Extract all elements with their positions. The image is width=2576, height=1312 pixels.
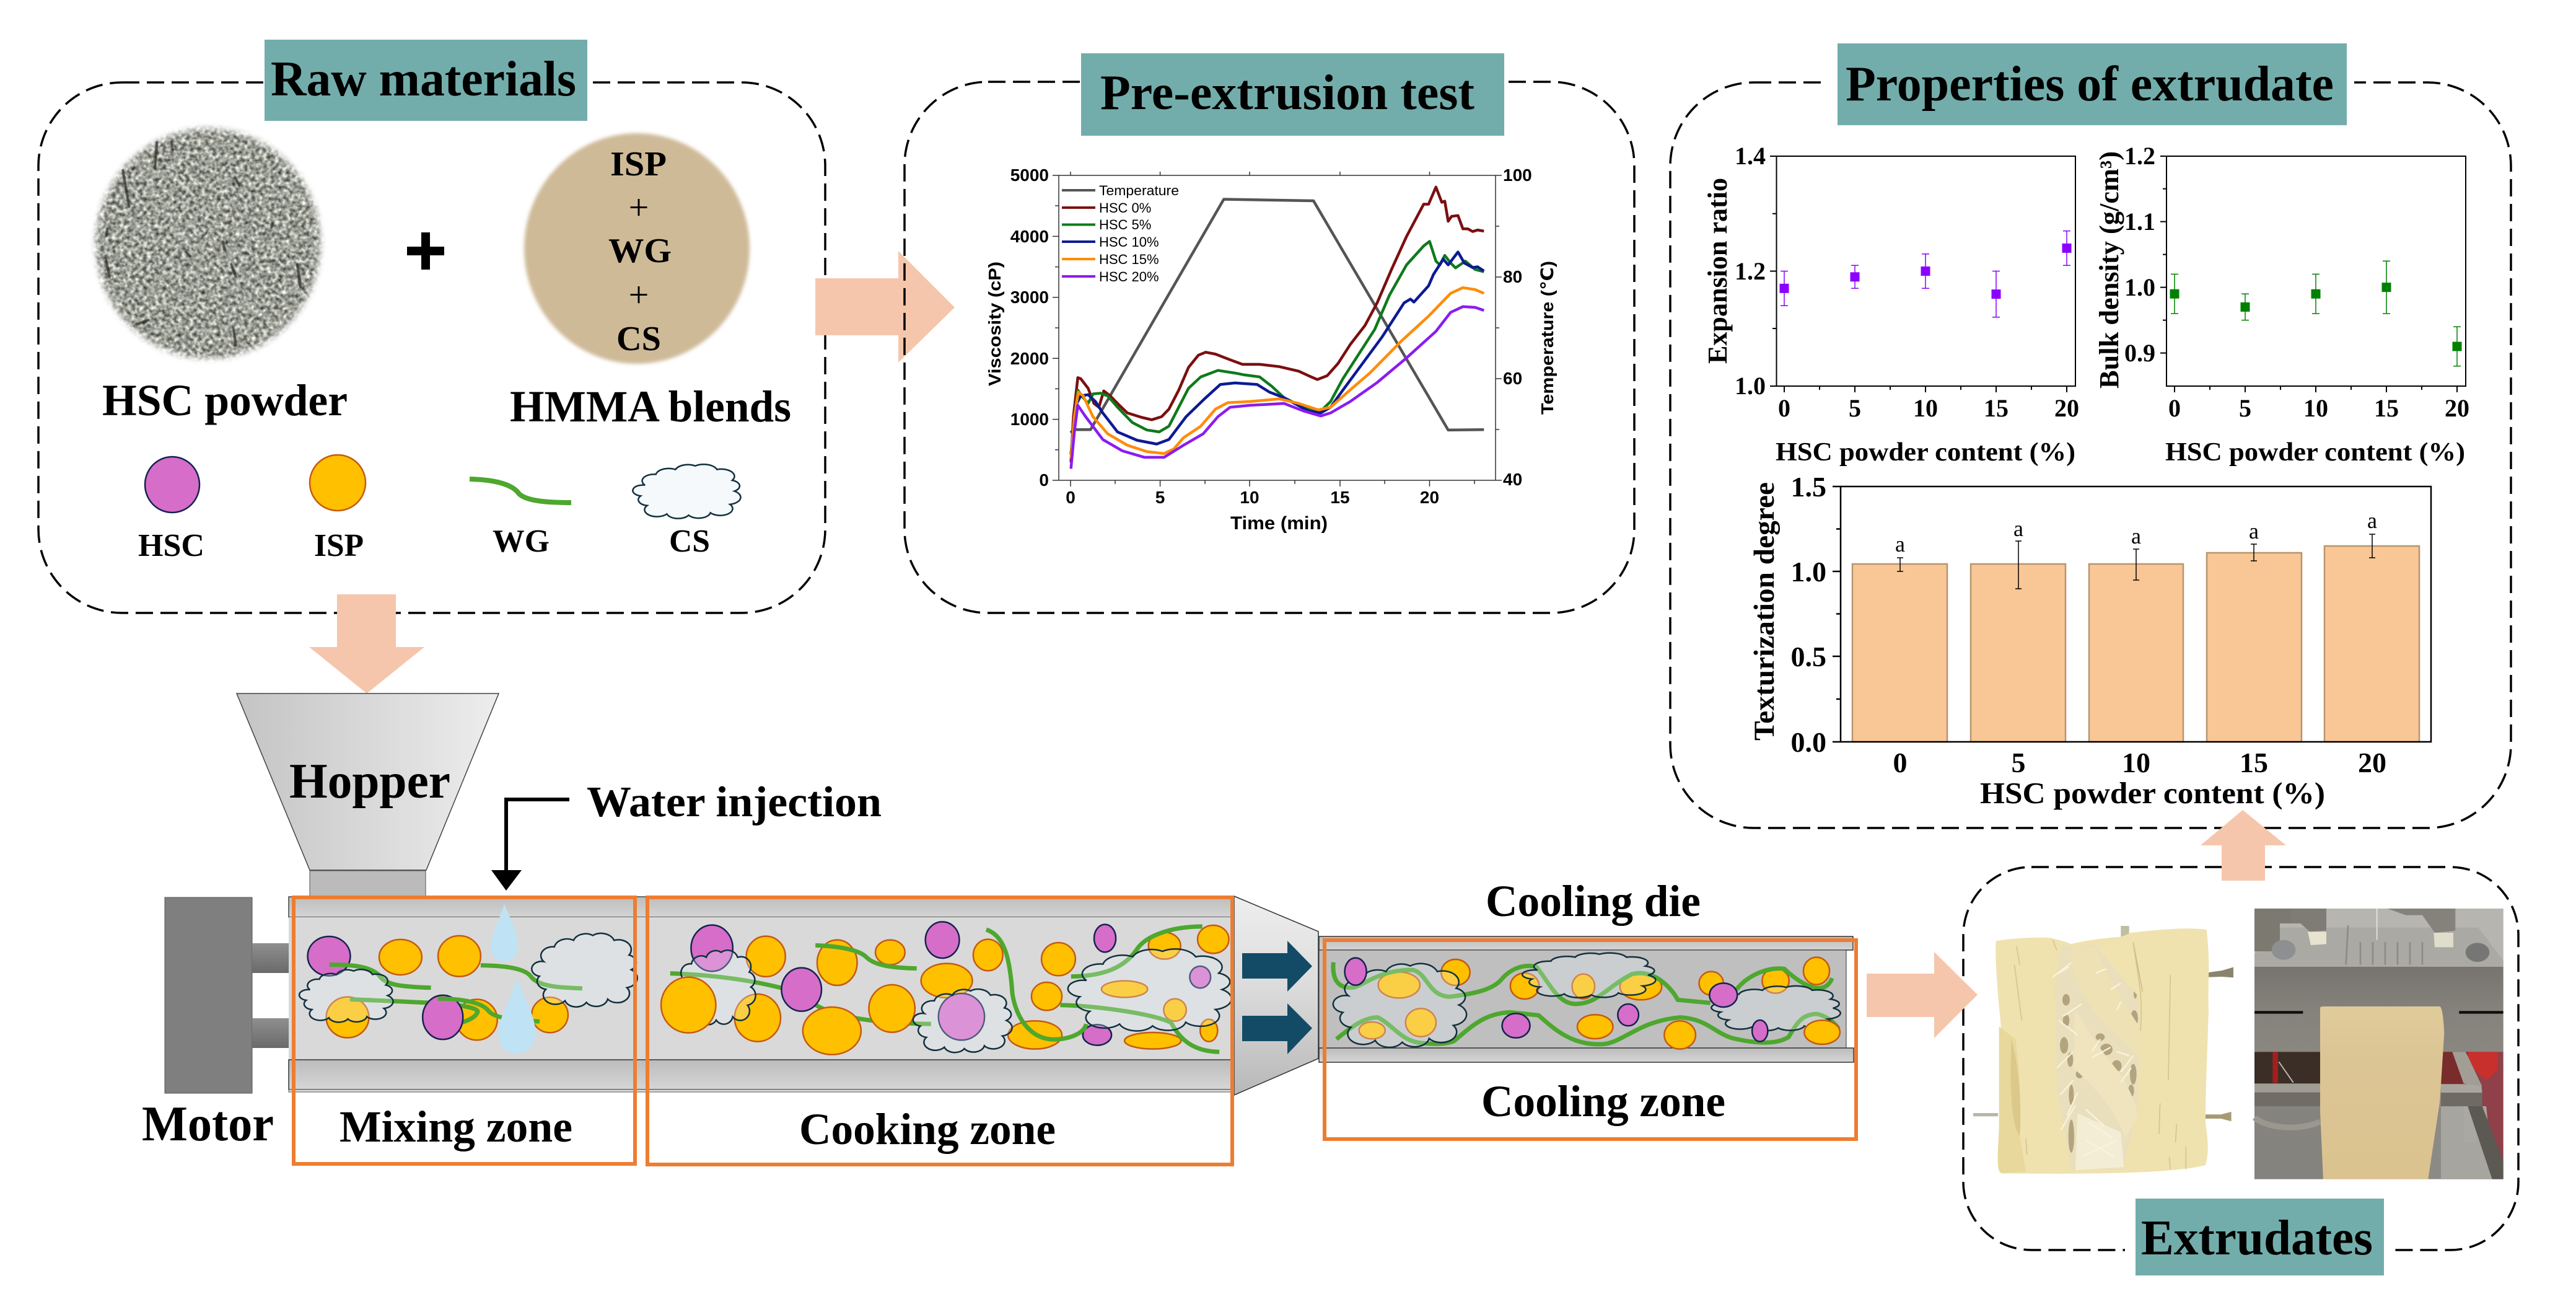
motor (165, 897, 252, 1093)
image: HMMA blends disc: ISP (610, 145, 667, 183)
zone box: cooking zone (647, 897, 1232, 1165)
panel: pre-extrusion test (905, 53, 1634, 613)
scatter chart: bulk density: 20 (2445, 394, 2469, 422)
line chart: viscosity and temperature: Time (min) (1230, 513, 1328, 534)
particles: cooking zone (661, 922, 1232, 1055)
scatter chart: bulk density: 1.2 (2124, 142, 2155, 170)
bar chart: texturization degree: 20 (2358, 747, 2386, 778)
arrow: flow lower (1242, 1003, 1312, 1054)
label: mixing zone: Mixing zone (340, 1102, 572, 1151)
bar chart: texturization degree: Texturization degree (1748, 482, 1781, 741)
line chart: viscosity and temperature: 0 (1039, 470, 1049, 490)
panel: raw materials (38, 40, 825, 613)
heading: extrudates (2125, 1199, 2395, 1275)
bar chart: texturization degree: HSC powder content (%) (1980, 776, 2325, 810)
line chart: viscosity and temperature: 0 (1066, 488, 1076, 507)
line chart: viscosity and temperature: 80 (1503, 267, 1522, 286)
arrow: raw materials to pre-extrusion (815, 251, 955, 363)
icon: plus (407, 232, 444, 270)
line chart: viscosity and temperature: Viscosity (cP) (985, 262, 1004, 386)
image: HSC powder (96, 129, 320, 358)
scatter chart: expansion ratio: 1.0 (1735, 372, 1766, 400)
line chart: viscosity and temperature: 1000 (1010, 410, 1049, 429)
image: HMMA blends disc: CS (616, 320, 661, 358)
heading: properties of extrudate (1828, 43, 2354, 125)
motor shafts (252, 943, 292, 1048)
arrow: raw materials to hopper (309, 594, 424, 693)
heading: raw materials (265, 40, 587, 121)
zone box: cooling zone (1325, 940, 1856, 1139)
particles: mixing zone (299, 904, 637, 1054)
image: HMMA blends disc (524, 133, 750, 364)
scatter chart: expansion ratio: 5 (1849, 394, 1861, 422)
heading: properties of extrudate: Properties of extrudate (1846, 57, 2334, 112)
cone (1234, 896, 1318, 1095)
scatter chart: bulk density: 1.1 (2124, 208, 2155, 236)
scatter chart: expansion ratio: HSC powder content (%) (1776, 438, 2075, 467)
barrel (289, 897, 1234, 1092)
legend: ISP: ISP (314, 528, 364, 563)
legend: HSC (138, 457, 204, 563)
line chart: viscosity and temperature: Temperature (℃) (1538, 261, 1557, 415)
line chart: viscosity and temperature: 2000 (1010, 349, 1049, 368)
arrow: cooling die to extrudates (1867, 952, 1978, 1038)
scatter chart: expansion ratio: 15 (1984, 394, 2009, 422)
bar chart: texturization degree: 1.0 (1790, 556, 1826, 588)
line chart: viscosity and temperature: HSC 15% (1099, 252, 1159, 267)
legend: CS (633, 464, 740, 559)
bar chart: texturization degree: 1.5 (1790, 471, 1826, 503)
arrow: extrudates to properties (2201, 810, 2286, 881)
line chart: viscosity and temperature: 20 (1420, 488, 1439, 507)
legend: HSC: HSC (138, 528, 204, 563)
bar chart: texturization degree: 0.0 (1790, 726, 1826, 758)
scatter chart: bulk density (2094, 142, 2469, 467)
line chart: viscosity and temperature: 60 (1503, 369, 1522, 388)
heading: pre-extrusion test: Pre-extrusion test (1100, 66, 1474, 120)
scatter chart: bulk density: 15 (2374, 394, 2399, 422)
scatter chart: bulk density: 0 (2168, 394, 2181, 422)
line chart: viscosity and temperature: HSC 0% (1099, 200, 1151, 216)
line chart: viscosity and temperature: 5000 (1010, 165, 1049, 185)
image: HMMA blends disc: + (629, 275, 649, 315)
scatter chart: bulk density: 5 (2239, 394, 2251, 422)
label: hopper: Hopper (289, 754, 450, 809)
bar chart: texturization degree: a (2131, 524, 2141, 548)
bar chart: texturization degree: 0.5 (1790, 641, 1826, 672)
cooling die (1319, 936, 1854, 1062)
scatter chart: bulk density: 10 (2303, 394, 2328, 422)
line chart: viscosity and temperature: HSC 10% (1099, 234, 1159, 250)
scatter chart: expansion ratio: 20 (2054, 394, 2079, 422)
label: cooking zone: Cooking zone (799, 1104, 1056, 1154)
scatter chart: bulk density: 1.0 (2124, 273, 2155, 301)
panel: properties of extrudate (1670, 43, 2511, 828)
scatter chart: expansion ratio: 1.2 (1735, 257, 1766, 285)
bar chart: texturization degree: a (2249, 519, 2259, 544)
image: HMMA blends disc: + (629, 187, 649, 227)
zone box: mixing zone (294, 897, 635, 1164)
bar chart: texturization degree: a (2013, 516, 2023, 541)
legend: WG: WG (493, 524, 550, 559)
line chart: viscosity and temperature: Temperature (1099, 183, 1179, 198)
arrowhead: water injection (491, 870, 522, 891)
scatter chart: expansion ratio: 1.4 (1735, 142, 1766, 170)
particles: cooling zone (1333, 953, 1841, 1049)
scatter chart: expansion ratio: Expansion ratio (1702, 178, 1733, 364)
scatter chart: expansion ratio (1702, 142, 2079, 467)
bar chart: texturization degree: a (2367, 508, 2377, 533)
line chart: viscosity and temperature: 15 (1330, 488, 1350, 507)
line chart: viscosity and temperature: 40 (1503, 470, 1522, 489)
legend: WG (470, 479, 571, 559)
panel: extrudates (1963, 867, 2518, 1275)
line chart: viscosity and temperature: 3000 (1010, 288, 1049, 307)
legend: ISP (310, 455, 366, 563)
arrow: flow upper (1242, 941, 1312, 992)
line chart: viscosity and temperature: 100 (1503, 165, 1532, 185)
bar chart: texturization degree: a (1895, 532, 1905, 557)
label: water injection: Water injection (587, 778, 882, 826)
heading: extrudates: Extrudates (2141, 1211, 2373, 1266)
bar chart: texturization degree (1748, 471, 2431, 810)
bar chart: texturization degree: 0 (1893, 747, 1907, 778)
scatter chart: expansion ratio: 0 (1778, 394, 1790, 422)
hopper (237, 693, 499, 897)
label: cooling die: Cooling die (1486, 876, 1701, 926)
scatter chart: expansion ratio: 10 (1913, 394, 1938, 422)
bar chart: texturization degree: 5 (2011, 747, 2026, 778)
diagram: extruder (142, 693, 1856, 1165)
scatter chart: bulk density: 0.9 (2124, 339, 2155, 367)
label: motor: Motor (142, 1097, 274, 1151)
line chart: viscosity and temperature: 4000 (1010, 227, 1049, 246)
line chart: viscosity and temperature: HSC 5% (1099, 217, 1151, 232)
heading: raw materials: Raw materials (271, 52, 576, 107)
label: cooling zone: Cooling zone (1481, 1076, 1725, 1126)
legend: CS: CS (669, 524, 710, 559)
bar chart: texturization degree: 10 (2122, 747, 2150, 778)
line chart: viscosity and temperature (985, 165, 1557, 534)
scatter chart: bulk density: HSC powder content (%) (2165, 438, 2465, 467)
bar chart: texturization degree: 15 (2240, 747, 2268, 778)
photo: fibrous extrudate (1973, 926, 2233, 1174)
label: HSC powder: HSC powder (102, 376, 348, 425)
image: HMMA blends disc: WG (608, 232, 672, 270)
line chart: viscosity and temperature: 10 (1240, 488, 1260, 507)
line chart: viscosity and temperature: HSC 20% (1099, 269, 1159, 284)
heading: pre-extrusion test (1081, 53, 1504, 136)
photo: extruder die with belt (2254, 909, 2504, 1179)
label: HMMA blends: HMMA blends (510, 382, 791, 431)
arrow: water injection (506, 799, 569, 871)
scatter chart: bulk density: Bulk density (g/cm³) (2094, 151, 2124, 389)
line chart: viscosity and temperature: 5 (1155, 488, 1165, 507)
